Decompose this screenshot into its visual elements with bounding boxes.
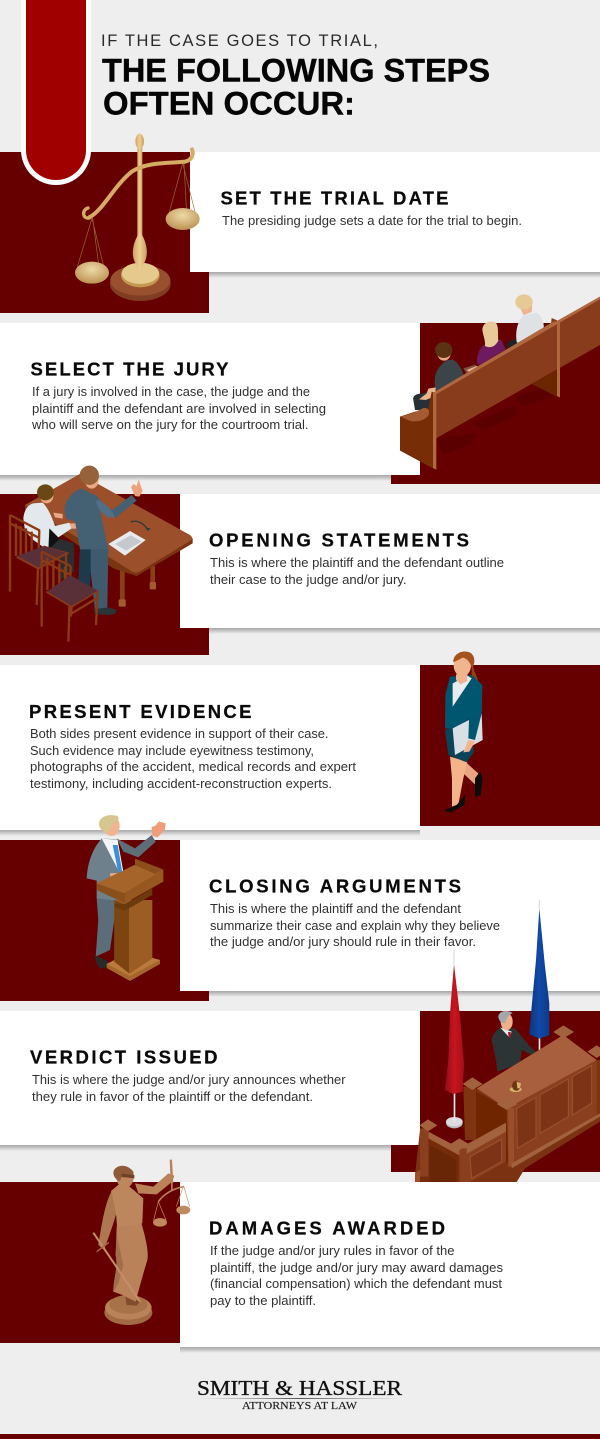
heading: SET THE TRIAL DATE <box>220 188 448 209</box>
text block: the judge and/or jury should rule in their favor. <box>210 934 476 949</box>
text block: The presiding judge sets a date for the trial to begin. <box>222 213 522 228</box>
text block: Both sides present evidence in support of their case. <box>30 726 328 741</box>
heading: OPENING STATEMENTS <box>209 530 469 551</box>
icon: golden scales <box>75 134 200 301</box>
logo: SMITH & HASSLER <box>197 1376 402 1400</box>
panel: damages awarded <box>0 1160 600 1353</box>
heading: CLOSING ARGUMENTS <box>209 876 461 897</box>
text block: This is where the judge and/or jury announces whether <box>32 1072 346 1087</box>
text block <box>32 1072 346 1104</box>
ribbon <box>21 0 91 185</box>
panel: select the jury <box>0 294 600 484</box>
text block: If a jury is involved in the case, the judge and the <box>32 384 310 399</box>
text block <box>31 384 326 432</box>
panel: verdict issued <box>0 900 600 1182</box>
title <box>101 32 490 122</box>
heading: PRESENT EVIDENCE <box>29 701 252 722</box>
text block <box>210 555 504 587</box>
text block: who will serve on the jury for the courtroom trial. <box>31 417 308 432</box>
text block: (financial compensation) which the defendant must <box>210 1276 502 1291</box>
logo: ATTORNEYS AT LAW <box>242 1400 358 1412</box>
text block: photographs of the accident, medical records and expert <box>30 759 356 774</box>
illustration: jury pew <box>400 294 600 470</box>
heading: VERDICT ISSUED <box>30 1047 218 1068</box>
icon: blue flag <box>529 900 549 1050</box>
text block: they rule in favor of the plaintiff or the defendant. <box>32 1089 313 1104</box>
illustration: woman with folder <box>444 652 483 813</box>
heading: SELECT THE JURY <box>30 359 229 380</box>
illustration: man at podium <box>87 815 166 981</box>
heading: DAMAGES AWARDED <box>209 1218 445 1239</box>
title: OFTEN OCCUR: <box>103 86 355 122</box>
text block <box>210 1243 504 1308</box>
panel: closing arguments <box>0 815 600 1001</box>
text block: If the judge and/or jury rules in favor of the <box>210 1243 454 1258</box>
illustration: judge bench and flags <box>415 900 600 1182</box>
text block: pay to the plaintiff. <box>210 1293 316 1308</box>
text block: summarize their case and explain why they believe <box>210 918 500 933</box>
illustration: lady justice statue <box>93 1160 190 1325</box>
text block: This is where the plaintiff and the defendant <box>210 901 461 916</box>
text block: Such evidence may include eyewitness testimony, <box>30 743 314 758</box>
title: THE FOLLOWING STEPS <box>102 53 490 89</box>
panel: present evidence <box>0 652 600 836</box>
panel: opening statements <box>0 466 600 655</box>
text block: their case to the judge and/or jury. <box>210 572 406 587</box>
title: IF THE CASE GOES TO TRIAL, <box>101 32 378 50</box>
footer bar <box>0 1434 600 1439</box>
text block <box>30 726 356 791</box>
text block: plaintiff and the defendant are involved in selecting <box>32 401 326 416</box>
illustration: counsel table <box>10 466 193 642</box>
panel: set the trial date <box>0 0 600 313</box>
icon: red flag <box>445 950 464 1128</box>
text block: This is where the plaintiff and the defendant outline <box>210 555 504 570</box>
bench body <box>415 1060 600 1182</box>
text block: plaintiff, the judge and/or jury may award damages <box>210 1260 504 1275</box>
text block <box>210 901 500 949</box>
logo <box>197 1376 402 1412</box>
text block: testimony, including accident-reconstruction experts. <box>30 776 332 791</box>
